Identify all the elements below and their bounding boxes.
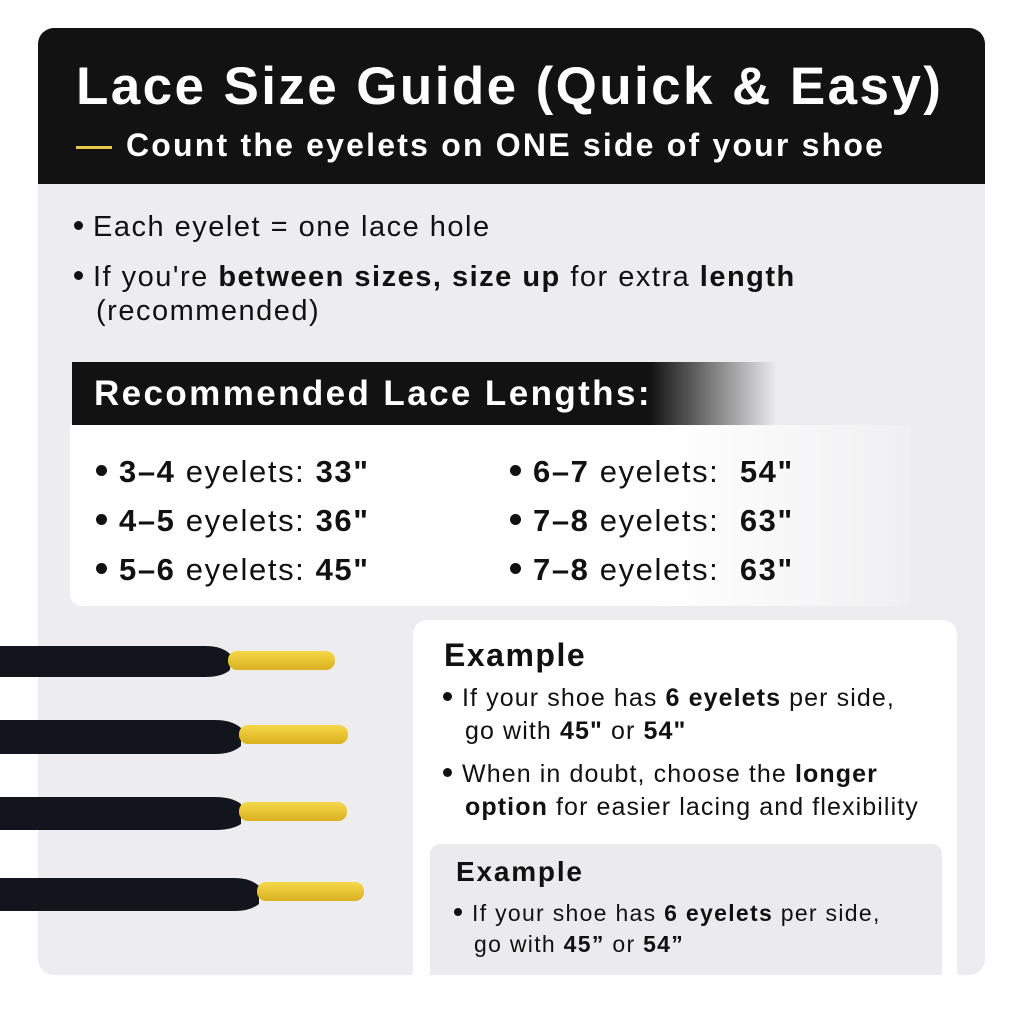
nested example box: If your shoe has 6 eyelets per side, — [472, 900, 881, 926]
title: Lace Size Guide (Quick & Easy) — [76, 57, 943, 116]
lengths list: 7–8 eyelets: 63" — [533, 552, 794, 587]
intro bullets: (recommended) — [96, 295, 320, 327]
lengths list: 6–7 eyelets: 54" — [533, 454, 794, 489]
example panel — [413, 620, 957, 975]
lengths panel — [70, 362, 826, 606]
nested example box — [430, 844, 942, 975]
example bullets: If your shoe has 6 eyelets per side, — [462, 684, 895, 712]
intro bullets: If you're between sizes, size up for extra length — [93, 261, 796, 293]
nested example box: Example — [456, 856, 584, 887]
example bullets: option for easier lacing and flexibility — [465, 793, 919, 821]
lengths list: 7–8 eyelets: 63" — [533, 503, 794, 538]
lengths list: 4–5 eyelets: 36" — [119, 503, 370, 538]
example bullets: When in doubt, choose the longer — [462, 760, 878, 788]
example heading: Example — [444, 637, 586, 673]
example bullets — [443, 684, 919, 821]
intro bullets — [74, 211, 796, 327]
lengths list — [70, 425, 910, 606]
intro bullets: Each eyelet = one lace hole — [93, 211, 491, 243]
section heading bar — [72, 362, 777, 425]
lengths list: 5–6 eyelets: 45" — [119, 552, 370, 587]
lengths list: 3–4 eyelets: 33" — [119, 454, 370, 489]
subtitle: Count the eyelets on ONE side of your shoe — [126, 127, 885, 163]
section heading bar: Recommended Lace Lengths: — [94, 374, 652, 413]
example bullets: go with 45" or 54" — [465, 717, 686, 745]
header bar — [38, 28, 985, 184]
illustration: shoelaces — [0, 646, 364, 911]
nested example box: go with 45” or 54” — [474, 931, 684, 957]
